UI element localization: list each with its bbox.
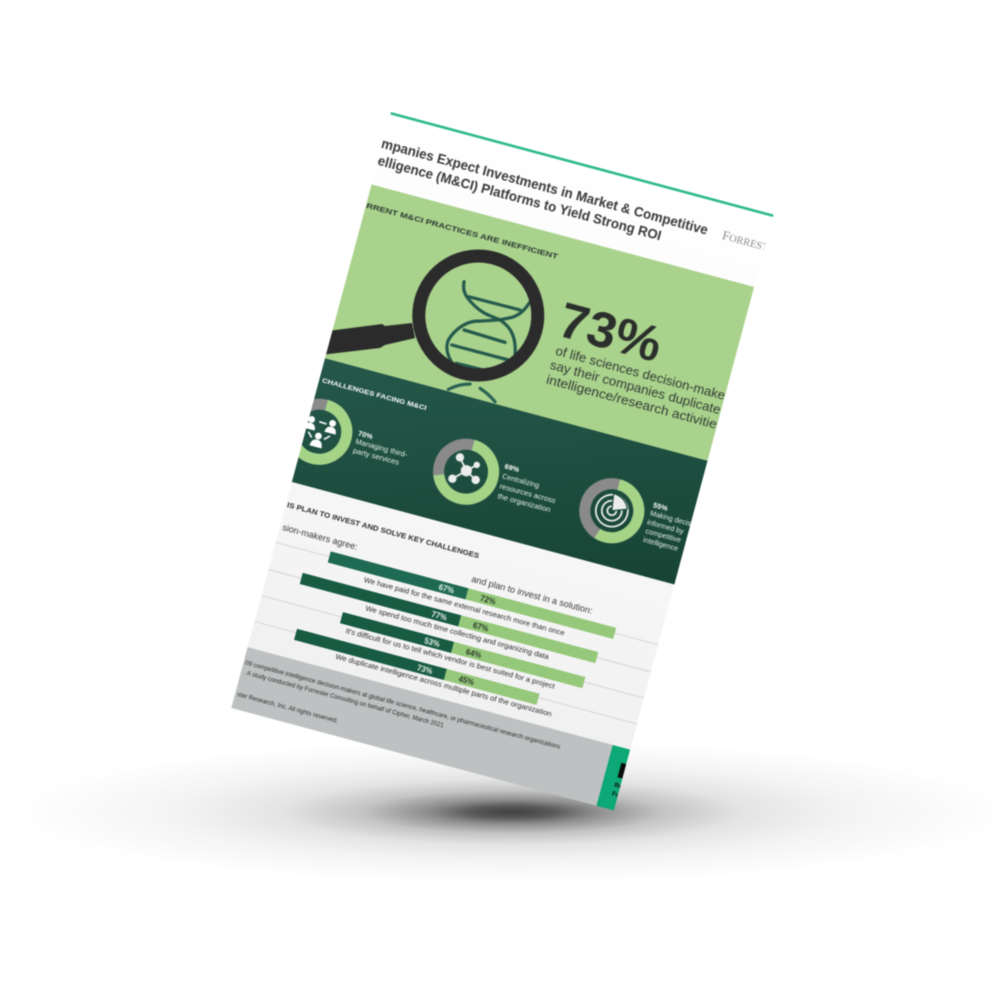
bar chart row: collecting data: We spend too much time collecting and organizing data <box>365 604 551 661</box>
bar chart row: duplicate intelligence: 73% <box>416 663 434 676</box>
panel: footer <box>231 647 613 806</box>
tilted infographic page <box>218 108 790 815</box>
label: 69 percent <box>497 463 556 513</box>
bar chart row: collecting data: 77% <box>430 610 448 623</box>
label: 69 percent: 69% <box>504 462 521 474</box>
callout: green footer tab: Re <box>613 783 623 791</box>
bar chart row: collecting data <box>297 573 598 673</box>
top accent line <box>390 112 774 217</box>
big stat: 73 percent: 73% <box>553 292 668 373</box>
bar chart row: duplicate intelligence: We duplicate intelligence across multiple parts of the organization <box>334 652 553 718</box>
bar chart row: collecting data: 67% <box>472 621 489 634</box>
stat description: of life sciences decision-make <box>554 343 727 403</box>
stat description <box>545 343 727 432</box>
label: 69 percent: Centralizing <box>501 471 540 490</box>
label: 69 percent: resources across <box>499 482 557 505</box>
dark panel background <box>292 358 708 584</box>
donut: 70 percent <box>298 398 354 466</box>
icon: magnifying glass <box>326 248 545 382</box>
panel: current practices <box>278 181 767 588</box>
panel background <box>324 184 754 463</box>
icon: connected people <box>306 415 337 450</box>
label: 55 percent: Making decisions <box>649 509 705 532</box>
footer background <box>231 647 613 806</box>
label: 55 percent: 55% <box>652 500 669 513</box>
stat description: say their companies duplicate <box>548 357 722 417</box>
callout: green footer tab <box>596 745 632 811</box>
bar chart row: duplicate intelligence: 45% <box>458 675 475 687</box>
drop shadow under the page <box>12 740 1000 884</box>
left column heading: sion-makers agree: <box>281 522 359 553</box>
bar chart row: duplicate intelligence <box>292 629 556 718</box>
section heading: IS PLAN TO INVEST AND SOLVE KEY CHALLENGES <box>286 500 480 560</box>
stat description: intelligence/research activitie <box>545 372 719 432</box>
panel: investment plans <box>254 502 658 724</box>
page background <box>248 483 674 749</box>
title: elligence (M&CI) Platforms to Yield Strong ROI <box>376 152 663 243</box>
bar chart row: external research <box>327 550 617 640</box>
label: 70 percent: 70% <box>357 428 374 441</box>
icon: network hub <box>447 452 481 485</box>
section heading: RRENT M&CI PRACTICES ARE INEFFICIENT <box>365 201 560 261</box>
panel: challenges <box>278 355 721 588</box>
bar chart row: external research: We have paid for the same external research more than once <box>363 575 566 638</box>
bar chart row: external research: 67% <box>438 583 455 595</box>
logo: Forrester: FORRESTER <box>721 227 783 258</box>
label: 70 percent <box>352 430 408 466</box>
bar chart row: choosing vendor: 64% <box>465 647 482 660</box>
label: 55 percent: competitive <box>645 526 682 544</box>
footnote text: ster Research, Inc. All rights reserved. <box>236 692 339 725</box>
label: 70 percent: party services <box>352 446 401 467</box>
icon: radar <box>594 493 630 528</box>
donut: 69 percent <box>432 438 500 505</box>
section heading: CHALLENGES FACING M&CI <box>321 377 427 412</box>
title: mpanies Expect Investments in Market & Competitive <box>380 135 710 238</box>
label: 55 percent <box>642 502 692 552</box>
bar chart row: choosing vendor: 53% <box>423 636 441 649</box>
label: 55 percent: intelligence <box>642 535 679 553</box>
illustration: DNA helix <box>436 282 531 404</box>
right column heading: and plan to invest in a solution: <box>470 574 594 617</box>
bar chart row: external research: 72% <box>479 594 497 607</box>
label: 70 percent: Managing third- <box>354 437 409 459</box>
callout: green footer tab: Fu <box>611 792 620 799</box>
footnote text: . A study conducted by Forrester Consulting on behalf of Cipher, March 2021 <box>243 670 445 730</box>
bar chart row: choosing vendor <box>337 612 585 698</box>
footnote text: 09 competitive intelligence decision-makers at global life science, healthcare, or pharmaceutical research organizations <box>244 661 561 751</box>
bar chart row: choosing vendor: It's difficult for us to tell which vendor is best suited for a project <box>345 626 557 691</box>
label: 55 percent: informed by <box>646 517 685 536</box>
label: 69 percent: the organization <box>497 491 552 514</box>
donut: 55 percent <box>579 478 645 544</box>
